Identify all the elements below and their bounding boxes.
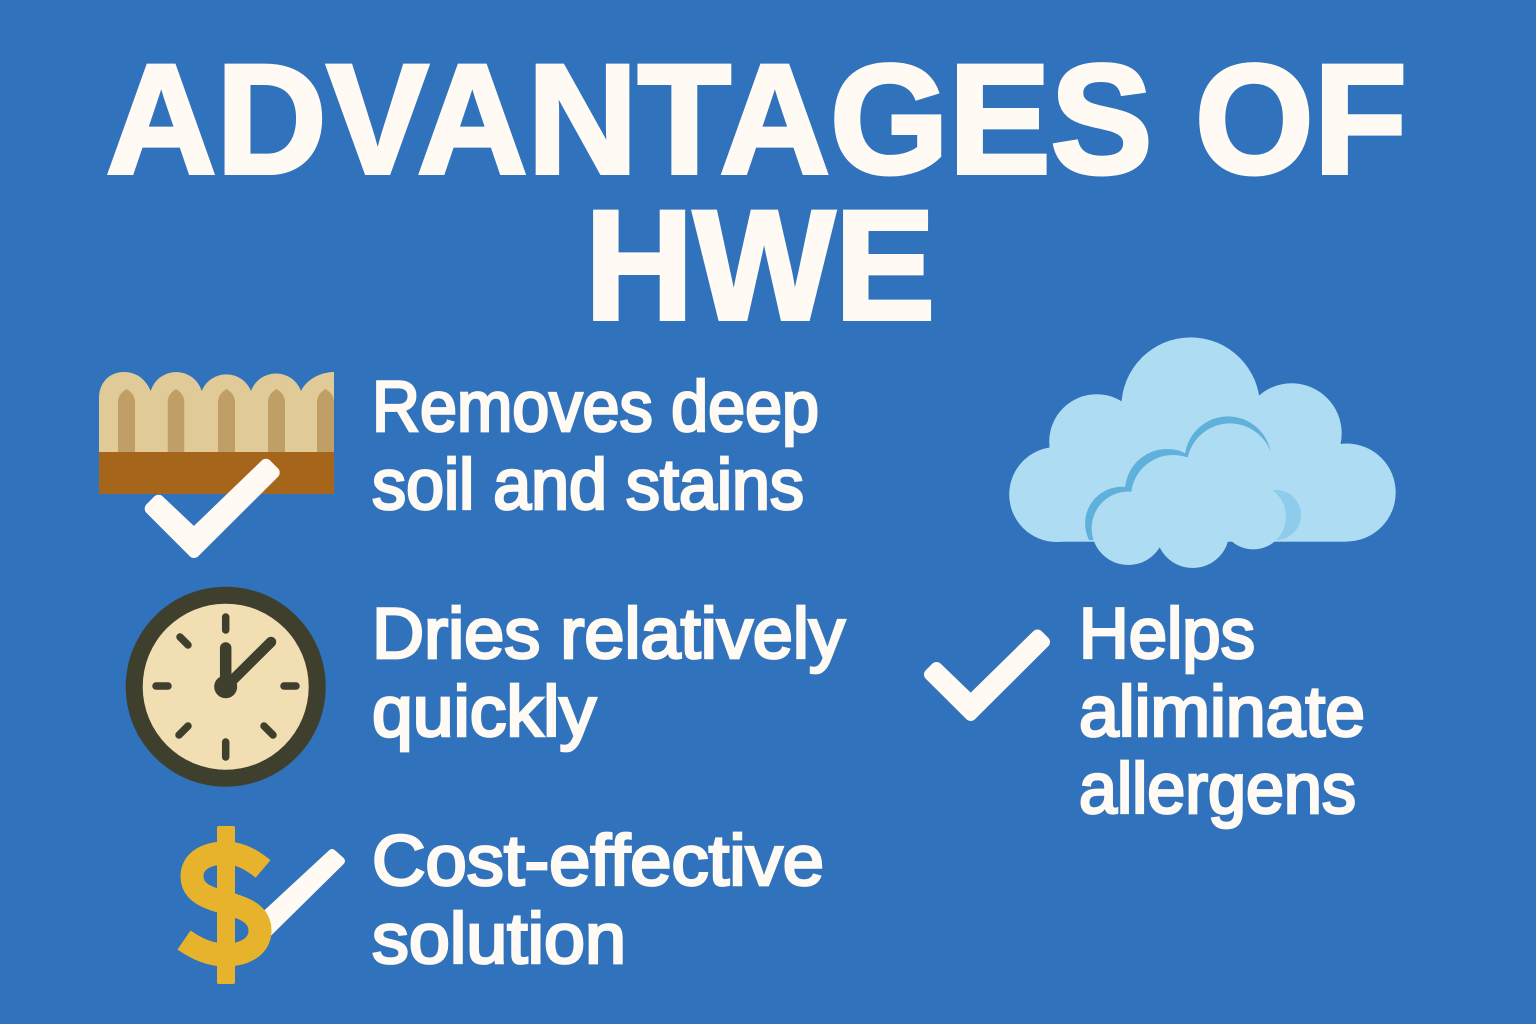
icon: carpet fibers with check mark — [99, 372, 334, 552]
infographic canvas — [99, 62, 1404, 984]
text: cost-effective solution: Cost-effective — [372, 822, 824, 901]
text: removes deep soil and stains: Removes deep — [372, 368, 819, 447]
text: dries relatively quickly — [372, 595, 846, 752]
icon: allergen cloud — [1009, 337, 1396, 568]
text: cost-effective solution — [372, 822, 824, 979]
text: helps aliminate allergens — [1079, 595, 1365, 829]
title: HWE — [585, 179, 935, 353]
text: dries relatively quickly: Dries relatively — [372, 595, 846, 674]
text: dries relatively quickly: quickly — [372, 673, 597, 752]
icon: clock — [126, 587, 326, 787]
icon: check mark — [930, 636, 1044, 715]
text: helps aliminate allergens: allergens — [1079, 750, 1356, 829]
title — [106, 33, 1407, 353]
icon: dollar sign with check stroke — [184, 826, 341, 984]
text: helps aliminate allergens: aliminate — [1079, 673, 1365, 752]
text: removes deep soil and stains — [372, 368, 819, 525]
text: cost-effective solution: solution — [372, 900, 626, 979]
text: removes deep soil and stains: soil and stains — [372, 446, 804, 525]
text: helps aliminate allergens: Helps — [1079, 595, 1255, 674]
title: ADVANTAGES OF — [106, 33, 1407, 207]
